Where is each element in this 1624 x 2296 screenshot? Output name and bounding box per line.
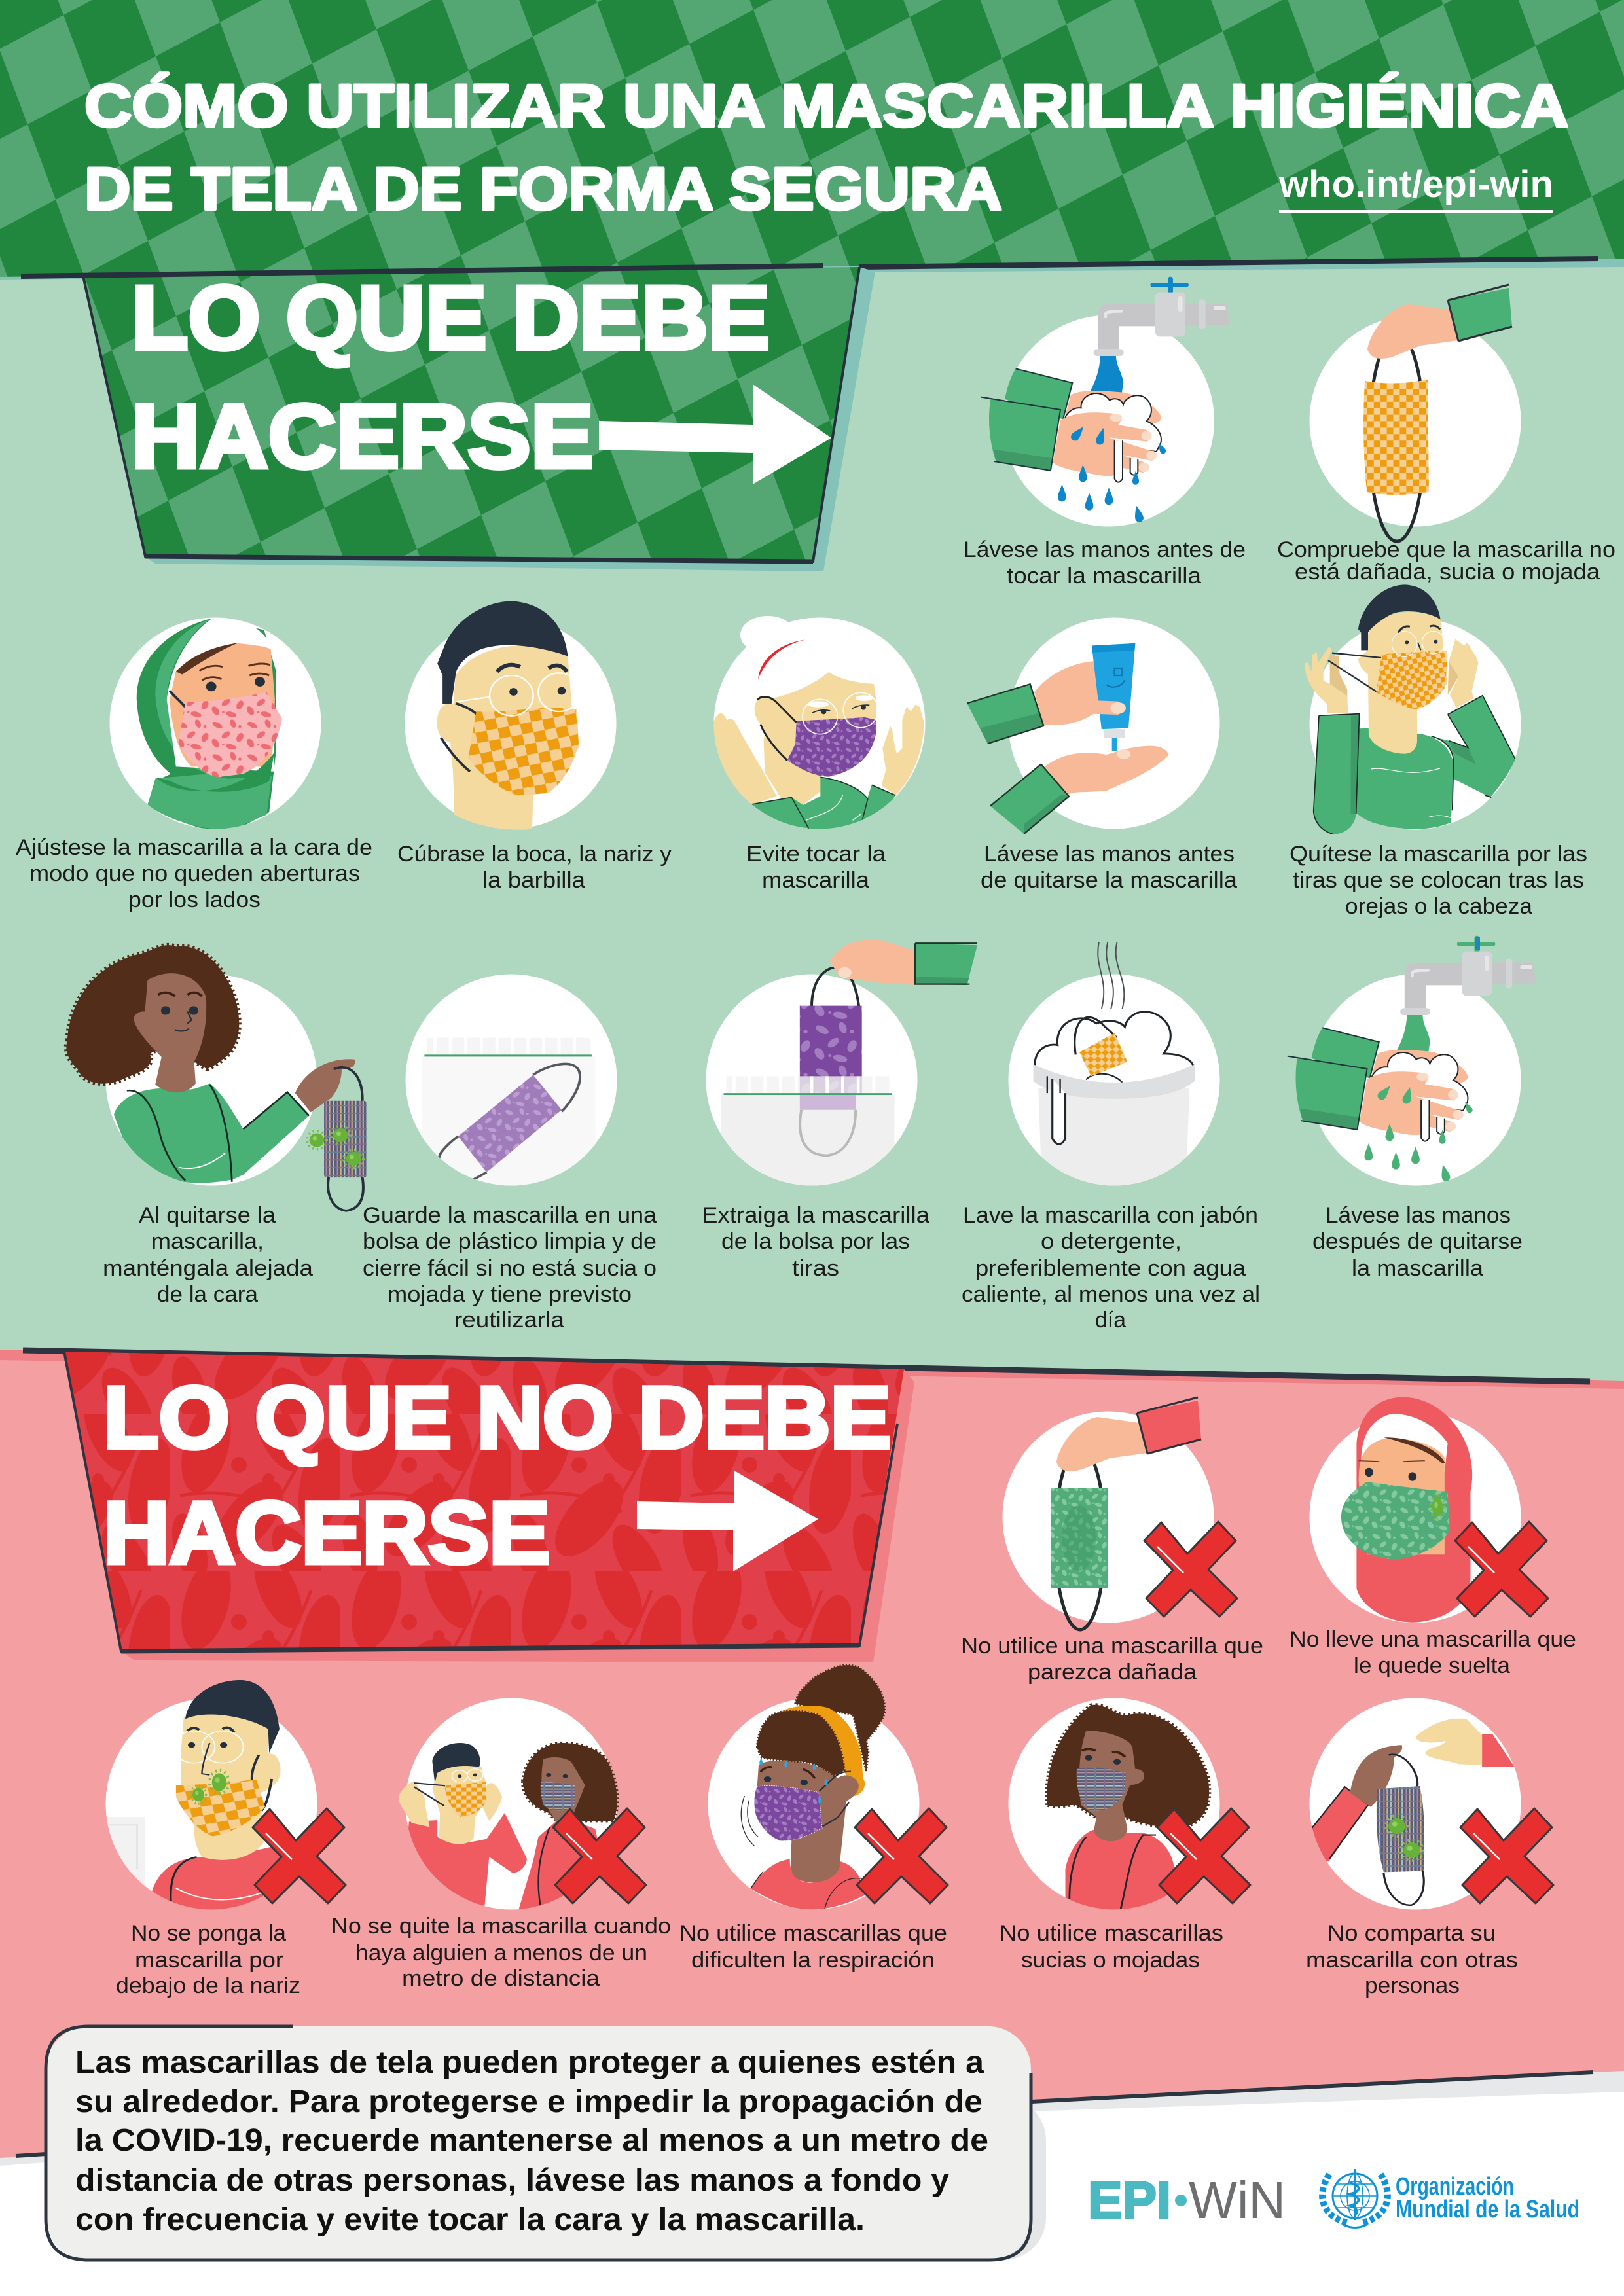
caption: No utilice una mascarilla que [961, 1634, 1263, 1659]
illustration: keep the mask on near others [399, 1698, 646, 1913]
caption: Cúbrase la boca, la nariz y [397, 842, 672, 867]
illustration: avoid touching the mask [713, 616, 926, 829]
caption: reutilizarla [454, 1308, 564, 1333]
caption: mojada y tiene previsto [388, 1282, 632, 1307]
illustration: wash hands after removing [1288, 936, 1536, 1186]
title: CÓMO UTILIZAR UNA MASCARILLA HIGIÉNICA [84, 72, 1568, 139]
banner: LO QUE DEBE HACERSE: LO QUE DEBE [132, 268, 770, 368]
caption: mascarilla, [151, 1229, 264, 1254]
caption: modo que no queden aberturas [29, 861, 360, 886]
no mark [253, 1808, 346, 1903]
caption: Quítese la mascarilla por las [1290, 842, 1587, 867]
caption: está dañada, sucia o mojada [1295, 560, 1600, 584]
caption [1290, 842, 1587, 919]
caption [964, 537, 1246, 588]
illustration: mask that makes breathing hard [708, 1665, 948, 1910]
caption [363, 1203, 657, 1333]
callout: key message box [46, 2026, 1046, 2260]
no mark [1460, 1808, 1553, 1903]
logo: WHO wordmark [1396, 2173, 1579, 2223]
illustration: cover mouth, nose and chin [405, 601, 617, 830]
banner: LO QUE NO DEBE HACERSE [59, 1348, 914, 1662]
illustration: fit the mask (hijab) [110, 618, 321, 832]
caption: Lave la mascarilla con jabón [963, 1203, 1258, 1228]
caption [1000, 1921, 1223, 1973]
caption: No utilice mascarillas que [679, 1921, 947, 1946]
no mark [855, 1808, 948, 1903]
illustration: store in a plastic bag [406, 974, 617, 1190]
caption: le quede suelta [1354, 1653, 1510, 1678]
callout: key message box: su alrededor. Para protegerse e impedir la propagación de [75, 2085, 983, 2119]
caption: Lávese las manos antes de [964, 537, 1246, 562]
caption: mascarilla [762, 868, 869, 893]
caption: No comparta su [1327, 1921, 1496, 1946]
caption: Evite tocar la [746, 842, 886, 867]
caption [1290, 1627, 1576, 1678]
logo: EPI-WiN: WiN [1189, 2171, 1286, 2229]
caption: caliente, al menos una vez al [962, 1282, 1260, 1307]
title [84, 72, 1568, 223]
caption: manténgala alejada [103, 1256, 313, 1281]
caption: mascarilla por [135, 1948, 283, 1973]
caption [746, 842, 886, 893]
illustration: loose mask [1309, 1397, 1548, 1623]
illustration: damaged mask [1003, 1397, 1237, 1630]
caption [116, 1921, 300, 1998]
caption [962, 1203, 1260, 1333]
logo: EPI-WiN: EPI [1088, 2171, 1171, 2229]
caption: mascarilla con otras [1306, 1948, 1518, 1973]
title: DE TELA DE FORMA SEGURA [84, 156, 1002, 223]
panel: what to do (green section) [0, 257, 1624, 1382]
header panel [0, 0, 1624, 283]
illustration: check the mask [1309, 285, 1521, 541]
caption: día [1095, 1308, 1126, 1333]
caption: personas [1365, 1973, 1460, 1998]
caption: de la bolsa por las [721, 1229, 910, 1254]
arrow [599, 384, 831, 484]
logo: WHO emblem [1322, 2169, 1388, 2228]
illustration: mask under the nose [106, 1680, 346, 1917]
no mark [1157, 1808, 1250, 1903]
caption: tiras que se colocan tras las [1293, 868, 1584, 893]
caption: cierre fácil si no está sucia o [363, 1256, 657, 1281]
logo: EPI-WiN [1088, 2171, 1286, 2229]
caption [981, 842, 1237, 893]
caption: Ajústese la mascarilla a la cara de [16, 835, 372, 860]
callout: key message box: la COVID-19, recuerde mantenerse al menos a un metro de [75, 2123, 988, 2158]
caption [1312, 1203, 1523, 1281]
caption: de quitarse la mascarilla [981, 868, 1237, 893]
caption [702, 1203, 929, 1281]
caption: No se ponga la [131, 1921, 286, 1946]
caption: Compruebe que la mascarilla no [1277, 537, 1615, 562]
caption [397, 842, 672, 893]
banner: LO QUE NO DEBE HACERSE: LO QUE NO DEBE [103, 1369, 891, 1467]
caption: Lávese las manos antes [984, 842, 1235, 867]
caption [331, 1914, 671, 1991]
panel: what not to do (red section) [0, 1350, 1624, 2159]
caption: de la cara [157, 1282, 258, 1307]
illustration: wash hands before touching [981, 277, 1229, 526]
caption: preferiblemente con agua [975, 1256, 1246, 1281]
caption: la mascarilla [1352, 1256, 1483, 1281]
caption: Guarde la mascarilla en una [363, 1203, 657, 1228]
divider line [23, 1350, 1590, 1382]
callout: key message box: con frecuencia y evite tocar la cara y la mascarilla. [75, 2202, 865, 2237]
caption: por los lados [128, 888, 261, 912]
caption: bolsa de plástico limpia y de [363, 1229, 657, 1254]
footer shadow band [0, 2071, 1624, 2166]
caption: No utilice mascarillas [1000, 1921, 1223, 1946]
caption [103, 1203, 313, 1307]
caption: tiras [792, 1256, 839, 1281]
illustration: sanitizer before removing [967, 618, 1220, 834]
caption [16, 835, 372, 912]
caption: Al quitarse la [139, 1203, 276, 1228]
caption [961, 1634, 1263, 1685]
no mark [1144, 1522, 1237, 1617]
logo: WHO wordmark: Mundial de la Salud [1396, 2196, 1579, 2223]
illustration: remove by the straps [1305, 584, 1521, 834]
illustration: wash the mask in a bucket [1008, 942, 1220, 1194]
arrow [637, 1471, 818, 1571]
caption [679, 1921, 947, 1973]
illustration: dirty or wet mask [1008, 1698, 1250, 1917]
caption [1306, 1921, 1518, 1998]
no mark [553, 1808, 646, 1903]
banner: LO QUE DEBE HACERSE [21, 266, 875, 571]
no mark [1455, 1522, 1548, 1617]
caption: Lávese las manos [1326, 1203, 1511, 1228]
illustration: keep mask away from face [66, 945, 367, 1211]
caption: Extraiga la mascarilla [702, 1203, 929, 1228]
logo: WHO wordmark: Organización [1396, 2173, 1514, 2200]
caption: metro de distancia [402, 1966, 600, 1991]
callout: key message box: Las mascarillas de tela pueden proteger a quienes estén a [75, 2045, 984, 2080]
caption: parezca dañada [1028, 1660, 1197, 1685]
caption: No lleve una mascarilla que [1290, 1627, 1576, 1652]
caption [1277, 537, 1615, 584]
banner: LO QUE DEBE HACERSE: HACERSE [132, 386, 594, 487]
caption: No se quite la mascarilla cuando [331, 1914, 671, 1939]
caption: haya alguien a menos de un [355, 1941, 647, 1965]
caption: tocar la mascarilla [1007, 564, 1201, 588]
illustration: take out of the bag [706, 939, 977, 1190]
caption: sucias o mojadas [1021, 1948, 1200, 1973]
caption: dificulten la respiración [691, 1948, 935, 1973]
caption: después de quitarse [1312, 1229, 1523, 1254]
website link: who.int/epi-win [1278, 163, 1553, 206]
banner: LO QUE NO DEBE HACERSE: HACERSE [103, 1484, 550, 1582]
illustration: do not share the mask [1308, 1698, 1553, 1910]
caption: la barbilla [482, 868, 585, 893]
caption: debajo de la nariz [116, 1973, 300, 1998]
caption: orejas o la cabeza [1345, 894, 1532, 919]
caption: o detergente, [1041, 1229, 1182, 1254]
callout: key message box: distancia de otras personas, lávese las manos a fondo y [75, 2163, 949, 2198]
